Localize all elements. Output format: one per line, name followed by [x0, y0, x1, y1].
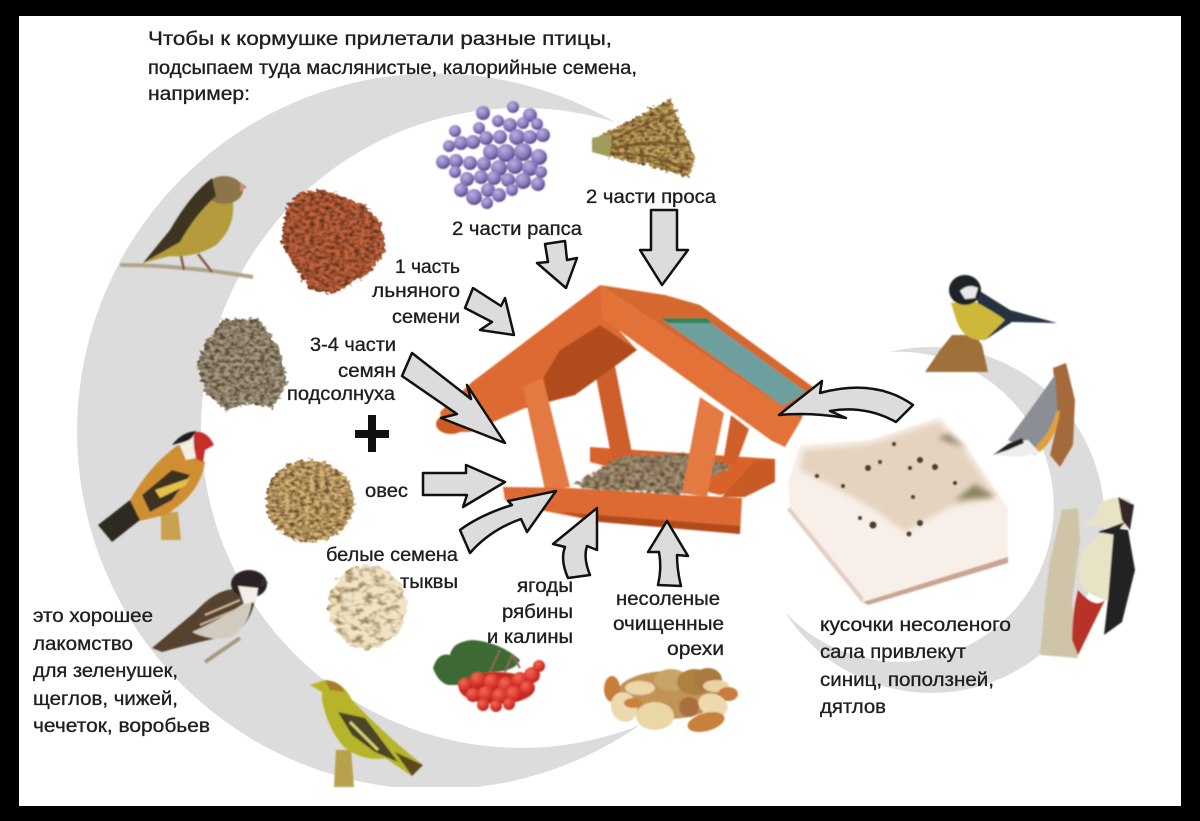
bird: greenfinch: [120, 176, 253, 277]
feeder log end: [436, 414, 466, 434]
icon: lard: [787, 417, 1008, 605]
bird: goldfinch: [98, 431, 214, 542]
arrow: berries: [553, 508, 597, 578]
label: sunflower: подсолнуха: [287, 383, 395, 405]
arrow: flax: [465, 288, 514, 335]
treat note: чечеток, воробьев: [33, 715, 210, 737]
label: sunflower: семян: [338, 360, 396, 382]
label: nuts: несоленые: [616, 588, 720, 610]
lard note: дятлов: [820, 696, 886, 718]
treat note: лакомство: [33, 633, 133, 655]
label: millet: 2 части проса: [586, 186, 716, 208]
arrow: pumpkin seeds: [460, 491, 556, 553]
label: pumpkin seeds: тыквы: [400, 571, 458, 593]
seed: sunflower: [197, 318, 288, 410]
feeder seed tray: [574, 453, 730, 495]
feeder front log: [503, 487, 742, 534]
arrow: millet: [640, 210, 688, 285]
label: sunflower: 3-4 части: [310, 334, 396, 356]
intro text: например:: [148, 83, 250, 105]
label: berries: [487, 575, 573, 648]
white strip below left crescent: [300, 787, 720, 806]
treat note: для зеленушек,: [33, 660, 178, 682]
bird: great tit: [925, 275, 1057, 372]
label: berries: рябины: [502, 601, 573, 623]
icon: nuts: [604, 668, 738, 736]
feeder rear posts: [595, 366, 749, 464]
feeder left roof: [440, 285, 637, 432]
label: nuts: орехи: [667, 638, 724, 660]
label: flax: семени: [392, 306, 460, 328]
icon: rowan berries: [433, 640, 545, 712]
intro text: подсыпаем туда маслянистые, калорийные семена,: [148, 57, 637, 79]
feeder side rail: [722, 459, 775, 497]
feeder green roof tile: [660, 318, 806, 406]
bird feeder: [436, 285, 813, 534]
feeder log shading: [560, 512, 740, 534]
left grey crescent: [77, 73, 640, 789]
lard note: кусочки несоленого: [820, 614, 1011, 636]
lard note: [820, 614, 1011, 718]
label: oats: овес: [365, 480, 408, 502]
bird: sparrow: [152, 570, 268, 662]
label: nuts: очищенные: [613, 613, 724, 635]
label: flax: 1 часть: [395, 256, 460, 278]
arrow: rapeseed: [537, 241, 577, 288]
feeder rear rail: [590, 447, 775, 495]
seed: millet: [592, 98, 695, 178]
right grey crescent: [785, 347, 1104, 693]
feeder green strip: [660, 318, 712, 323]
lard note: сала привлекут: [820, 641, 966, 663]
arrow: oats: [423, 465, 505, 507]
feeder roof underside: [525, 325, 637, 408]
label: rapeseed: 2 части рапса: [452, 218, 582, 240]
label: pumpkin seeds: [326, 544, 458, 593]
treat note: [33, 605, 210, 737]
intro text: Чтобы к кормушке прилетали разные птицы,: [148, 28, 612, 50]
arrow: lard: [779, 381, 913, 422]
arrow: sunflower: [402, 353, 505, 443]
seed: oats: [266, 460, 354, 542]
bird: siskin: [310, 680, 423, 787]
bird: woodpecker: [1040, 497, 1135, 658]
label: flax: [372, 256, 460, 328]
lard note: синиц, поползней,: [820, 669, 994, 691]
intro text: [148, 28, 637, 105]
treat note: это хорошее: [33, 605, 153, 627]
label: pumpkin seeds: белые семена: [326, 544, 458, 566]
arrow: nuts: [648, 521, 688, 586]
plus sign: [355, 415, 389, 452]
label: nuts: [613, 588, 724, 660]
feeder front posts: [523, 378, 724, 497]
label: flax: льняного: [372, 280, 460, 302]
label: berries: ягоды: [517, 575, 573, 597]
treat note: щеглов, чижей,: [33, 688, 178, 710]
label: sunflower: [287, 334, 396, 405]
seed: pumpkin: [328, 565, 406, 649]
bird: nuthatch: [993, 363, 1075, 467]
feeder front roof beam: [600, 285, 801, 447]
seed: flax: [282, 190, 386, 293]
label: berries: и калины: [487, 626, 573, 648]
feeder rear roof panel: [600, 285, 813, 420]
seed: rapeseed: [436, 101, 550, 209]
